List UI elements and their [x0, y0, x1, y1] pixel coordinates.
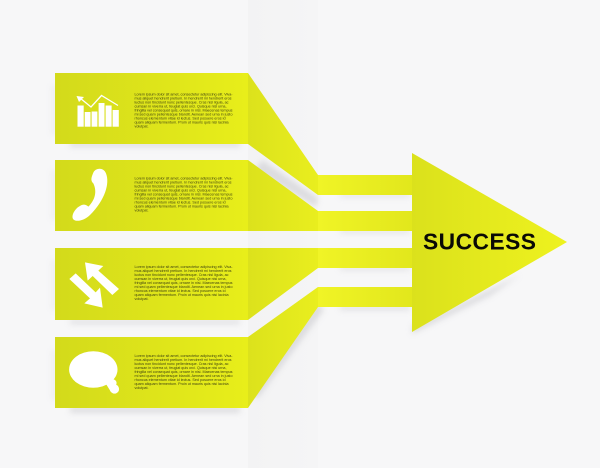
ribbon: arrows row — [55, 248, 412, 320]
text: phone row: mus aliquet hendrerit pretium. In hendrerit mi hendrerit eros — [134, 180, 232, 184]
text: phone row: quam aliquam fermentum. Proin ut mauris quis nisi lacinia — [134, 204, 229, 208]
text: phone row: fringilla vel consequat quis, ornare in nisi. Maecenas tempus — [134, 192, 233, 196]
text: arrows row: rhoncus elementum vitae id lectus. Sed posuere eros id — [134, 289, 226, 293]
text: speech bubble row: cumsan in viverra ut, feugiat quis orci. Quisque nisi urna, — [134, 366, 226, 370]
text: arrows row — [134, 265, 233, 301]
soft shadows — [52, 85, 520, 413]
text: phone row: rhoncus elementum vitae id lectus. Sed posuere eros id — [134, 200, 226, 204]
text: phone row: mi sed quam pellentesque blandit. Aenean sed urna in justo — [134, 196, 232, 200]
text: arrows row: luctus non tincidunt nunc pellentesque. Cras nisl ligula, ac — [134, 273, 229, 277]
text: arrows row: mi sed quam pellentesque blandit. Aenean sed urna in justo — [134, 285, 232, 289]
panel: phone row — [55, 160, 412, 231]
text: phone row: volutpat. — [134, 208, 148, 212]
icon: telephone handset — [73, 169, 107, 221]
text: arrows row: mus aliquet hendrerit pretium. In hendrerit mi hendrerit eros — [134, 269, 232, 273]
panel: speech bubble row — [55, 287, 412, 408]
icon: exchange arrows — [69, 262, 119, 308]
background fold band — [248, 0, 318, 468]
icon: bar chart with trend arrow — [76, 96, 119, 127]
text: chart row: mus aliquet hendrerit pretium. In hendrerit mi hendrerit eros — [134, 96, 232, 100]
text: speech bubble row: fringilla vel consequat quis, ornare in nisi. Maecenas tempus — [134, 370, 233, 374]
text: arrows row: cumsan in viverra ut, feugiat quis orci. Quisque nisi urna, — [134, 277, 226, 281]
text: phone row: Lorem ipsum dolor sit amet, consectetur adipiscing elit. Viva- — [134, 176, 233, 180]
panel: arrows row — [55, 248, 412, 320]
text: speech bubble row: quam aliquam fermentum. Proin ut mauris quis nisi lacinia — [134, 382, 229, 386]
ribbon: chart row — [55, 73, 412, 195]
text: arrows row: volutpat. — [134, 297, 148, 301]
text: speech bubble row: luctus non tincidunt nunc pellentesque. Cras nisl ligula, ac — [134, 362, 229, 366]
text: speech bubble row: volutpat. — [134, 386, 148, 390]
text: phone row — [134, 176, 233, 212]
text: chart row: cumsan in viverra ut, feugiat quis orci. Quisque nisi urna, — [134, 104, 226, 108]
text: phone row: luctus non tincidunt nunc pellentesque. Cras nisl ligula, ac — [134, 184, 229, 188]
panel: chart row — [55, 73, 412, 195]
text: arrows row: fringilla vel consequat quis, ornare in nisi. Maecenas tempus — [134, 281, 233, 285]
text: chart row: fringilla vel consequat quis, ornare in nisi. Maecenas tempus — [134, 108, 233, 112]
ribbon: phone row — [55, 160, 412, 231]
text: chart row — [134, 92, 233, 128]
text: chart row: mi sed quam pellentesque blandit. Aenean sed urna in justo — [134, 112, 232, 116]
text: speech bubble row: rhoncus elementum vitae id lectus. Sed posuere eros id — [134, 378, 226, 382]
text: speech bubble row — [134, 354, 233, 390]
ribbon: speech bubble row — [55, 287, 412, 408]
text: chart row: volutpat. — [134, 124, 148, 128]
icon: speech bubble — [69, 351, 119, 394]
heading: success: SUCCESS — [423, 228, 536, 254]
text: chart row: rhoncus elementum vitae id lectus. Sed posuere eros id — [134, 116, 226, 120]
text: speech bubble row: mi sed quam pellentesque blandit. Aenean sed urna in justo — [134, 374, 232, 378]
text: chart row: quam aliquam fermentum. Proin ut mauris quis nisi lacinia — [134, 120, 229, 124]
text: chart row: luctus non tincidunt nunc pellentesque. Cras nisl ligula, ac — [134, 100, 229, 104]
text: speech bubble row: mus aliquet hendrerit pretium. In hendrerit mi hendrerit eros — [134, 358, 232, 362]
text: phone row: cumsan in viverra ut, feugiat quis orci. Quisque nisi urna, — [134, 188, 226, 192]
text: arrows row: Lorem ipsum dolor sit amet, consectetur adipiscing elit. Viva- — [134, 265, 233, 269]
text: chart row: Lorem ipsum dolor sit amet, consectetur adipiscing elit. Viva- — [134, 92, 233, 96]
text: arrows row: quam aliquam fermentum. Proin ut mauris quis nisi lacinia — [134, 293, 229, 297]
arrow head — [412, 153, 567, 332]
text: speech bubble row: Lorem ipsum dolor sit amet, consectetur adipiscing elit. Viva- — [134, 354, 233, 358]
